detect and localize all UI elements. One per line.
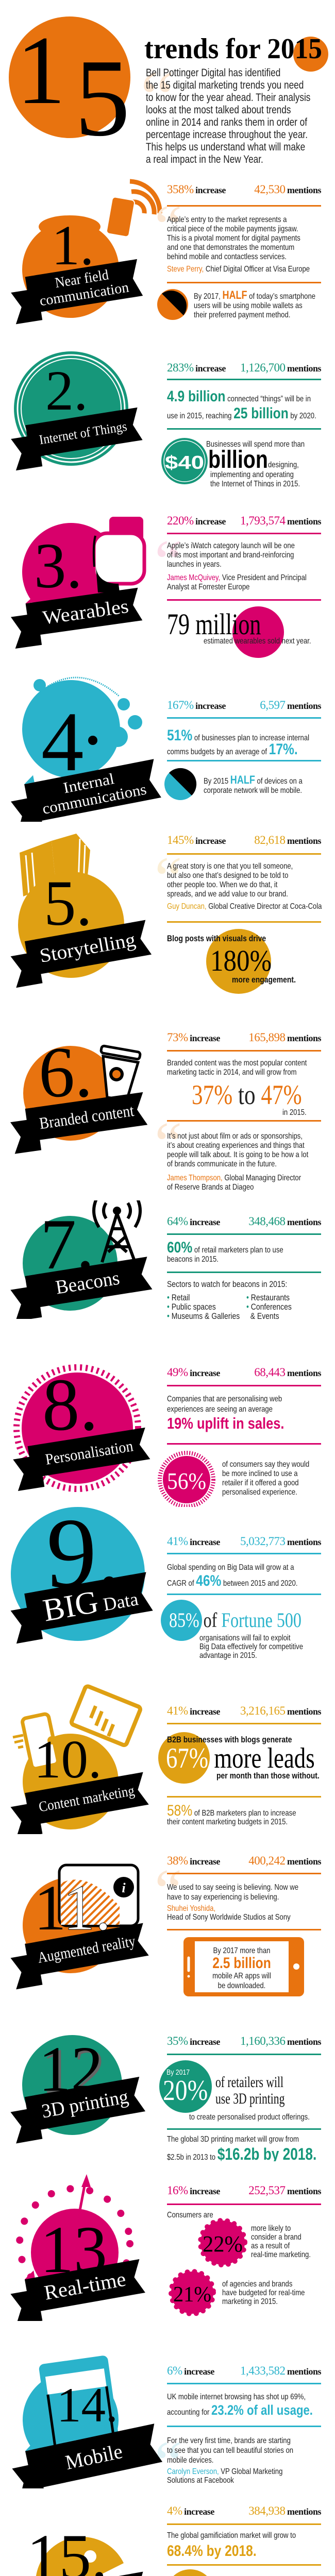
ribbon: 3D printing: 3D printing bbox=[40, 2086, 130, 2123]
ribbon: Personalisation: Personalisation bbox=[44, 1437, 135, 1468]
stats 9: 41% increase bbox=[167, 1535, 220, 1548]
icon: 3D circle bbox=[22, 2034, 122, 2135]
stats 12: 1,160,336 mentions bbox=[240, 2035, 321, 2047]
stats 4 bbox=[167, 699, 322, 711]
panel: 12 3D printing: 20% bbox=[163, 2075, 208, 2107]
panel: 9 big data bbox=[10, 1507, 322, 1660]
stats 2 bbox=[167, 361, 322, 374]
attribution 11 bbox=[167, 1904, 291, 1922]
phone: 2.5 billion bbox=[183, 1937, 304, 1996]
panel: 7 beacons: • Conferences bbox=[246, 1302, 292, 1312]
panel: 4 internal communications: comms budgets by an average of 17%. bbox=[167, 741, 298, 758]
quote 6: people will talk about. It is going to be how a lot bbox=[167, 1150, 308, 1159]
pie: half bbox=[164, 768, 196, 800]
panel: 10 content marketing: their content marketing budgets in 2015. bbox=[167, 1818, 288, 1826]
stat: 19% uplift: Companies that are personalising web bbox=[167, 1395, 282, 1403]
ribbon: Real-time bbox=[7, 2252, 147, 2326]
panel: 12 3D printing: of retailers will bbox=[215, 2074, 283, 2091]
icon: cup: 6. bbox=[39, 1032, 93, 1112]
panel: 6 branded content bbox=[10, 1031, 322, 1192]
panel: 8 personalisation: 19% uplift in sales. bbox=[167, 1414, 284, 1432]
stats 7: 64% increase bbox=[167, 1215, 220, 1228]
attribution 6: James Thompson, Global Managing Director bbox=[167, 1174, 301, 1182]
badge text: retailer if it offered a good bbox=[222, 1479, 299, 1487]
stats 11 bbox=[167, 1854, 321, 1870]
stats 1: 42,530 mentions bbox=[254, 183, 321, 196]
pie text: corporate network will be mobile. bbox=[204, 786, 302, 795]
ribbon: Personalisation bbox=[10, 1420, 152, 1491]
panel: 12 3D printing: use 3D printing bbox=[215, 2090, 284, 2107]
stats 2: 283% increase bbox=[167, 361, 226, 374]
stats 5: 145% increase bbox=[167, 834, 226, 846]
panel: 11 augmented reality: “ bbox=[155, 1856, 182, 1925]
stats 11: 38% increase bbox=[167, 1854, 220, 1867]
icon: cup bbox=[23, 1032, 141, 1141]
phone text: 2.5 billion bbox=[212, 1955, 271, 1972]
badge: 56% bbox=[160, 1453, 213, 1506]
intro text: the 15 digital marketing trends you need bbox=[146, 79, 304, 91]
stats 14: 1,433,582 mentions bbox=[240, 2364, 321, 2377]
stats 3 bbox=[167, 514, 322, 527]
attribution 3 bbox=[167, 573, 307, 591]
stats 4: 6,597 mentions bbox=[260, 699, 321, 711]
icon: big 15: 1 bbox=[16, 16, 65, 125]
phone text: be downloaded. bbox=[218, 1981, 265, 1990]
ribbon: BIG Data bbox=[7, 1565, 155, 1643]
quote 1: behind mobile and contactless services. bbox=[167, 252, 287, 261]
quote 6 bbox=[167, 1132, 308, 1168]
panel: 12 3D printing bbox=[0, 2030, 335, 2161]
stat: 51%: 51% of businesses plan to increase internal bbox=[167, 727, 309, 744]
panel: 2 internet of things: use in 2015, reaching 25 billion by 2020. bbox=[167, 405, 316, 422]
ribbon: Internal communications bbox=[7, 752, 163, 835]
stats 1: 358% increase bbox=[167, 183, 226, 196]
ribbon: Augmented reality: Augmented reality bbox=[36, 1933, 137, 1967]
panel: 7 beacons: • Retail bbox=[167, 1293, 190, 1302]
quote 6: of brands communicate in the future. bbox=[167, 1160, 277, 1168]
stats 8 bbox=[167, 1366, 322, 1379]
quote 6: It’s not just about film or ads or sponsorships, bbox=[167, 1132, 303, 1141]
phone text: mobile AR apps will bbox=[212, 1972, 271, 1980]
badge text bbox=[222, 1460, 309, 1497]
icon: hand with phone bbox=[22, 181, 160, 318]
stats 7: 348,468 mentions bbox=[248, 1215, 321, 1228]
ribbon: Storytelling bbox=[7, 913, 153, 988]
pie text bbox=[194, 289, 315, 319]
intro text bbox=[146, 67, 310, 165]
icon: AR frame bbox=[23, 1865, 138, 1973]
ribbon: Wearables bbox=[8, 581, 144, 649]
stats 11: 400,242 mentions bbox=[248, 1854, 321, 1867]
stats 5 bbox=[167, 834, 322, 846]
icon: ringed circle bbox=[14, 351, 128, 466]
stats 13: 252,537 mentions bbox=[248, 2184, 321, 2197]
badge text: of consumers say they would bbox=[222, 1460, 309, 1469]
icon: watch bbox=[22, 517, 144, 621]
stat: 85%: 85% of Fortune 500 bbox=[169, 1608, 301, 1632]
stats 8: 68,443 mentions bbox=[254, 1366, 321, 1379]
stats 13 bbox=[167, 2184, 321, 2199]
panel: 7 beacons bbox=[10, 1200, 322, 1319]
panel: 5 storytelling: more engagement. bbox=[232, 975, 296, 985]
stats 10: 3,216,165 mentions bbox=[240, 1704, 321, 1717]
quote 5: A great story is one that you tell someone, bbox=[167, 862, 293, 871]
ribbon: Mobile bbox=[8, 2417, 164, 2501]
panel: 8 personalisation bbox=[13, 1364, 322, 1507]
pie text: their preferred payment method. bbox=[194, 311, 290, 319]
panel: 2 internet of things: designing, bbox=[268, 461, 299, 469]
panel: 13 real-time: have budgeted for real-time bbox=[222, 2289, 305, 2297]
icon: 3D circle: 12. bbox=[39, 2034, 119, 2105]
ribbon: Gamification bbox=[7, 2565, 150, 2576]
ribbon: Beacons: Beacons bbox=[54, 1267, 121, 1299]
stats 12: 35% increase bbox=[167, 2035, 220, 2047]
stats 9 bbox=[167, 1535, 322, 1548]
attribution 6 bbox=[167, 1174, 301, 1192]
intro text: percentage increase throughout the year. bbox=[146, 129, 308, 141]
ribbon: Content marketing: Content marketing bbox=[38, 1783, 136, 1816]
ribbon: Beacons bbox=[8, 1249, 154, 1321]
ribbon: Branded content bbox=[8, 1085, 149, 1154]
stat text 6: marketing tactic in 2014, and will grow from bbox=[167, 1068, 297, 1077]
stats 9: 5,032,773 mentions bbox=[240, 1535, 321, 1548]
quote 1: Apple’s entry to the market represents a bbox=[167, 215, 287, 224]
quote 5: other people too. When we do that, it bbox=[167, 880, 277, 889]
pacman: 80% bbox=[166, 2569, 242, 2576]
icon: open book bbox=[18, 834, 124, 978]
stat: 79 million: 79 million+ bbox=[167, 607, 267, 641]
panel: 13 real-time: real-time marketing. bbox=[251, 2250, 311, 2259]
panel: 4 internal communications bbox=[11, 677, 322, 822]
panel: 14 mobile bbox=[0, 2342, 335, 2488]
stats 14 bbox=[167, 2364, 321, 2380]
attribution 14: Solutions at Facebook bbox=[167, 2476, 234, 2485]
pie text: By 2015 HALF of devices on a bbox=[204, 773, 303, 786]
ribbon: Internal communications: Internal bbox=[62, 770, 115, 796]
attribution 14: Carolyn Everson, VP Global Marketing bbox=[167, 2467, 282, 2476]
stats 3: 220% increase bbox=[167, 514, 226, 527]
quote 14: For the very first time, brands are starting bbox=[167, 2436, 291, 2445]
attribution 1: Steve Perry, Chief Digital Officer at Visa Europe bbox=[167, 265, 310, 274]
header: “ bbox=[140, 55, 175, 141]
icon: ringed circle: 2. bbox=[45, 359, 88, 422]
stats 8: 49% increase bbox=[167, 1366, 220, 1379]
attribution 6: of Reserve Brands at Diageo bbox=[167, 1183, 254, 1192]
quote 6: it’s about creating experiences and things that bbox=[167, 1141, 305, 1150]
stat: $40 billion: Businesses will spend more than bbox=[206, 440, 305, 449]
ribbon: Real-time: Real-time bbox=[42, 2267, 128, 2304]
intro text: a real impact in the New Year. bbox=[146, 154, 263, 165]
badge: $40: $40 bbox=[165, 452, 204, 473]
badge: 21%: 21% bbox=[173, 2283, 211, 2307]
stat text 6: Branded content was the most popular content bbox=[167, 1059, 307, 1067]
stat: 19% uplift: experiences are seeing an average bbox=[167, 1405, 273, 1414]
stat: 23.2%: UK mobile internet browsing has shot up 69%, bbox=[167, 2393, 306, 2401]
stat: 4.9 billion: 4.9 billion connected “things” will be in bbox=[167, 388, 311, 405]
stat text 6 bbox=[167, 1059, 307, 1077]
stats 10: 41% increase bbox=[167, 1704, 220, 1717]
stat: 68.4%: The global gamificiation market will grow to bbox=[167, 2531, 296, 2540]
ribbon: 3D printing bbox=[7, 2070, 147, 2144]
intro text: This helps us understand what will make bbox=[146, 141, 305, 153]
panel: 3 wearables: “ bbox=[155, 527, 182, 596]
badge: 21% bbox=[171, 2272, 213, 2314]
icon: splash bbox=[22, 677, 142, 789]
panel: 2 internet of things: implementing and operating bbox=[210, 470, 294, 479]
panel: 3 wearables: estimated wearables sold next year. bbox=[204, 637, 311, 646]
panel: 13 real-time: marketing in 2015. bbox=[222, 2297, 278, 2306]
attribution 14 bbox=[167, 2467, 282, 2485]
pie text bbox=[204, 773, 303, 795]
panel: 14 mobile: accounting for 23.2% of all usage. bbox=[167, 2402, 313, 2418]
icon: big circle bbox=[11, 1498, 145, 1641]
panel: 6 branded content: “ bbox=[155, 1109, 182, 1178]
icon: phone: 14. bbox=[57, 2378, 118, 2432]
panel: 9 big data: organisations will fail to exploit bbox=[199, 1634, 290, 1642]
ribbon: Content marketing bbox=[7, 1765, 150, 1838]
icon: gear badge: 8. bbox=[42, 1364, 98, 1446]
icon: AR frame: 1 bbox=[34, 1873, 66, 1944]
icon: phone and chart: 10. bbox=[34, 1729, 102, 1789]
quote 11: have to say experiencing is believing. bbox=[167, 1893, 279, 1902]
stat: 37% to 47%: 37% to 47% bbox=[192, 1079, 302, 1110]
icon: beacon tower bbox=[23, 1194, 140, 1311]
title: trends for 2015 bbox=[144, 33, 322, 65]
icon: open book: 5. bbox=[44, 868, 92, 939]
icon: splash: 4 bbox=[41, 694, 83, 789]
stats 7 bbox=[167, 1215, 322, 1228]
stat: 67% more leads: B2B businesses with blogs generate bbox=[167, 1735, 292, 1744]
badge: 22% bbox=[200, 2221, 245, 2265]
icon: clock with arrow bbox=[20, 2174, 130, 2299]
quote 3: of its most important and brand-reinforcing bbox=[167, 551, 294, 560]
icon: 3D circle: 12. bbox=[41, 2036, 122, 2107]
quote 3: launches in years. bbox=[167, 560, 222, 569]
ribbon: Near field communication bbox=[8, 252, 144, 324]
panel: 2 internet of things: billion bbox=[208, 446, 268, 473]
quote 3: Apple’s iWatch category launch will be one bbox=[167, 541, 295, 550]
badge text: personalised experience. bbox=[222, 1488, 297, 1497]
pie: half bbox=[157, 289, 188, 320]
quote 1: critical piece of the mobile payments jigsaw. bbox=[167, 225, 298, 233]
icon: clock with arrow: 13. bbox=[40, 2213, 124, 2287]
panel: 12 3D printing: to create personalised product offerings. bbox=[189, 2113, 310, 2122]
panel: 5 storytelling: 180% bbox=[210, 944, 272, 977]
ribbon: Internal communications: communications bbox=[41, 781, 148, 818]
icon: big 15 bbox=[9, 16, 130, 159]
ribbon: Augmented reality bbox=[7, 1916, 150, 1989]
panel: 5 storytelling: “ bbox=[155, 844, 182, 912]
phone text: By 2017 more than bbox=[213, 1946, 270, 1955]
stat: 60%: 60% of retail marketers plan to use bbox=[167, 1239, 283, 1256]
stat: $16.2b: The global 3D printing market will grow from bbox=[167, 2135, 299, 2144]
ribbon: Mobile: Mobile bbox=[63, 2439, 125, 2474]
stats 15: 384,938 mentions bbox=[248, 2504, 321, 2517]
panel: 7 beacons: • Public spaces bbox=[167, 1302, 216, 1312]
header bbox=[9, 16, 328, 165]
panel: 13 real-time bbox=[0, 2172, 335, 2321]
quote 14: mobile devices. bbox=[167, 2456, 213, 2465]
panel: 7 beacons: • Restaurants bbox=[246, 1293, 290, 1302]
ribbon: Internet of Things bbox=[8, 400, 144, 470]
icon: big 15: 5 bbox=[75, 36, 130, 159]
ribbon: Near field communication: Near field bbox=[54, 267, 110, 291]
icon: phone bbox=[23, 2355, 120, 2468]
stats 10 bbox=[167, 1704, 321, 1720]
panel: 15 gamification: 68.4% by 2018. bbox=[167, 2543, 257, 2560]
ribbon: Branded content: Branded content bbox=[38, 1101, 135, 1132]
stats 3: 1,793,574 mentions bbox=[240, 514, 321, 527]
badge: 22%: 22% bbox=[203, 2231, 243, 2257]
panel: 13 real-time: of agencies and brands bbox=[222, 2280, 292, 2289]
panel: 10 content marketing: 67% more leads bbox=[166, 1742, 315, 1774]
stats 5: 82,618 mentions bbox=[254, 834, 321, 846]
intro text: to know for the year ahead. Their analysis bbox=[146, 92, 310, 104]
sectors list: Sectors to watch for beacons in 2015: bbox=[167, 1279, 287, 1289]
ribbon: Wearables: Wearables bbox=[41, 596, 130, 629]
stats 15 bbox=[167, 2504, 321, 2520]
stat: 46%: Global spending on Big Data will grow at a bbox=[167, 1563, 294, 1572]
stats 6: 165,898 mentions bbox=[248, 1031, 321, 1044]
phone text bbox=[199, 1946, 284, 1991]
panel: 7 beacons: beacons in 2015. bbox=[167, 1255, 219, 1264]
attribution 11: Shuhei Yoshida, bbox=[167, 1904, 215, 1913]
stat: 19% uplift bbox=[167, 1395, 282, 1414]
stat text 13: Consumers are bbox=[167, 2211, 213, 2219]
ribbon: Near field communication: communication bbox=[39, 279, 130, 309]
stats 2: 1,126,700 mentions bbox=[240, 361, 321, 374]
pie text: By 2017, HALF of today’s smartphone bbox=[194, 289, 315, 301]
panel: 13 real-time: as a result of bbox=[251, 2242, 290, 2250]
icon: beacon tower: 7. bbox=[40, 1205, 94, 1284]
stats 13: 16% increase bbox=[167, 2184, 220, 2197]
badge text: be more inclined to use a bbox=[222, 1469, 298, 1478]
panel: 1 near field communication bbox=[11, 179, 322, 325]
stat: 20% retailers: By 2017 bbox=[166, 2068, 190, 2077]
icon: gear badge bbox=[16, 1364, 138, 1489]
ribbon: BIG Data: BIG Data bbox=[40, 1578, 140, 1629]
attribution 5: Guy Duncan, Global Creative Director at Coca-Cola bbox=[167, 902, 322, 911]
panel: 10 content marketing bbox=[10, 1684, 322, 1834]
stats 6: 73% increase bbox=[167, 1031, 220, 1044]
badge: $40 bbox=[161, 438, 208, 484]
pie text: users will be using mobile wallets as bbox=[194, 301, 303, 310]
attribution 3: Analyst at Forrester Europe bbox=[167, 583, 249, 591]
quote 3 bbox=[167, 541, 295, 569]
quote 1: and one that demonstrates the momentum bbox=[167, 243, 294, 252]
quote 1 bbox=[167, 215, 300, 261]
panel: 1 near field communication: “ bbox=[155, 192, 182, 261]
panel: 5 storytelling bbox=[10, 834, 322, 994]
stats 12 bbox=[167, 2035, 321, 2050]
icon: hand with phone: 1. bbox=[52, 214, 94, 277]
stats 14: 6% increase bbox=[167, 2364, 214, 2377]
intro text: Bell Pottinger Digital has identified bbox=[146, 67, 280, 79]
stats 6 bbox=[167, 1031, 322, 1044]
attribution 11: Head of Sony Worldwide Studios at Sony bbox=[167, 1913, 291, 1922]
icon: phone and chart bbox=[13, 1686, 141, 1829]
attribution 3: James McQuivey, Vice President and Principal bbox=[167, 573, 307, 582]
panel: 9 big data: Big Data effectively for competitive bbox=[199, 1642, 303, 1651]
stats 4: 167% increase bbox=[167, 699, 226, 711]
quote 14 bbox=[167, 2436, 293, 2465]
badge: 56%: 56% bbox=[167, 1468, 206, 1494]
quote 5 bbox=[167, 862, 293, 899]
quote 14: to see that you can tell beautiful stories on bbox=[167, 2446, 293, 2455]
intro text: looks at the most talked about trends bbox=[146, 104, 291, 116]
intro text: online in 2014 and ranks them in order of bbox=[146, 116, 307, 128]
panel: 11 augmented reality bbox=[0, 1850, 335, 1999]
icon: AR frame: i bbox=[122, 1880, 126, 1895]
quote 11 bbox=[167, 1883, 298, 1902]
stat: 58%: 58% of B2B marketers plan to increase bbox=[167, 1802, 296, 1819]
stat: 180%: Blog posts with visuals drive bbox=[167, 934, 266, 943]
panel: 13 real-time: consider a brand bbox=[251, 2233, 301, 2242]
icon: AR frame: 1. bbox=[63, 1873, 111, 1944]
quote 11: We used to say seeing is believing. Now we bbox=[167, 1883, 298, 1892]
panel: 9 big data: advantage in 2015. bbox=[199, 1651, 257, 1660]
stats 1 bbox=[167, 183, 322, 196]
panel: 3 wearables bbox=[11, 514, 322, 658]
panel: 10 content marketing: per month than those without. bbox=[216, 1771, 320, 1781]
stats 15: 4% increase bbox=[167, 2504, 214, 2517]
panel: 2 internet of things bbox=[11, 351, 322, 487]
panel: 13 real-time: more likely to bbox=[251, 2224, 291, 2233]
quote 5: but also one that’s designed to be told to bbox=[167, 871, 288, 880]
panel: 15 gamification bbox=[0, 2499, 335, 2576]
panel: 6 branded content: in 2015. bbox=[282, 1108, 307, 1117]
quote 5: spreads, and we add value to our brand. bbox=[167, 890, 288, 899]
ribbon: Internet of Things: Internet of Things bbox=[38, 419, 128, 447]
icon: watch: 3. bbox=[34, 531, 82, 602]
panel: 9 big data: CAGR of 46% between 2015 and 2020. bbox=[167, 1572, 297, 1589]
ribbon: Storytelling: Storytelling bbox=[38, 929, 137, 967]
quote 1: This is a pivotal moment for digital payments bbox=[167, 234, 300, 243]
